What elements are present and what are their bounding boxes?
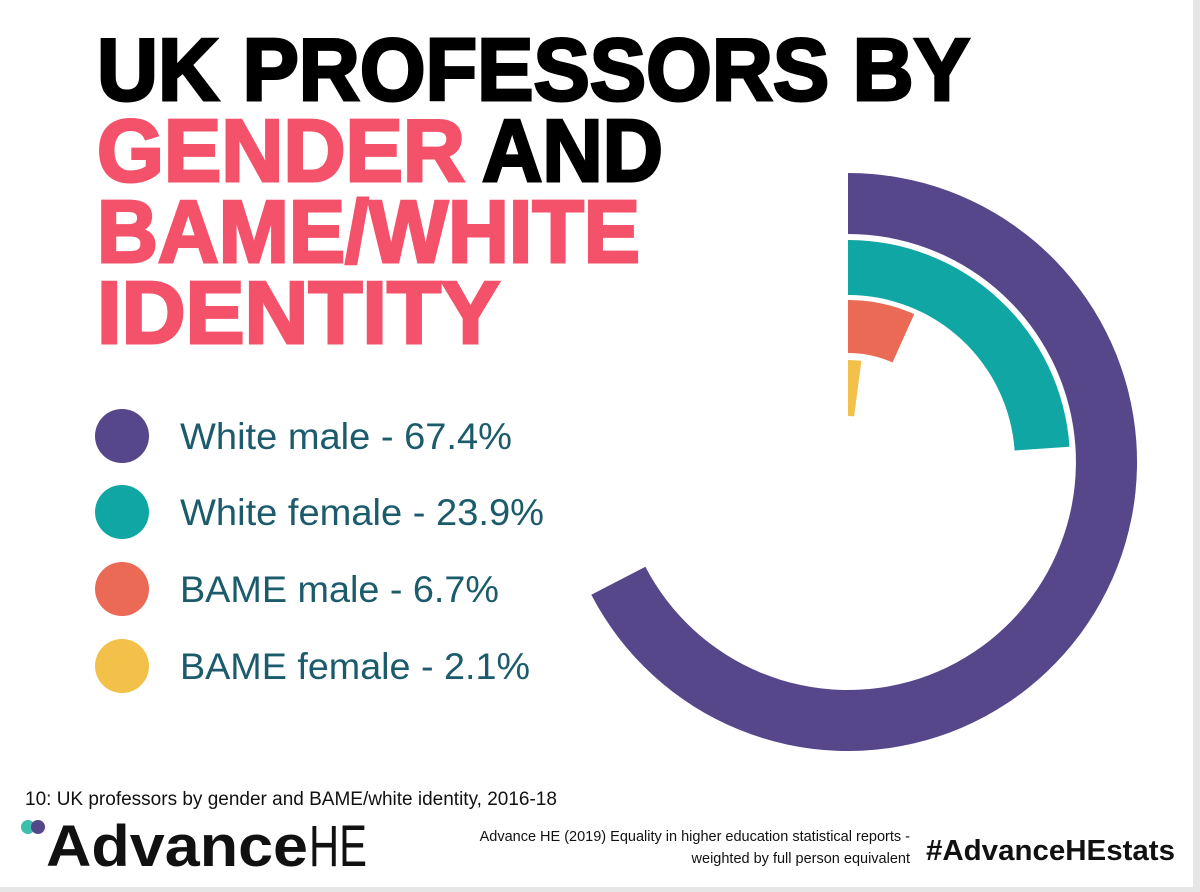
legend item: BAME female: BAME female - 2.1%	[180, 646, 530, 687]
citation	[480, 829, 910, 867]
legend item: White female	[95, 485, 544, 539]
title: IDENTITY	[97, 263, 500, 362]
radial bar chart	[591, 173, 1137, 751]
legend item: White male	[95, 409, 512, 463]
arc: BAME female 2.1%	[848, 360, 861, 416]
title: GENDER	[97, 101, 465, 200]
legend item: White female: White female - 23.9%	[180, 492, 544, 533]
legend item: BAME male	[95, 562, 499, 616]
title: BAME/WHITE	[97, 182, 640, 281]
citation: weighted by full person equivalent	[691, 851, 910, 867]
legend	[95, 409, 544, 693]
logo: Advance HE: Advance	[46, 814, 308, 879]
arc: White female 23.9%	[848, 240, 1070, 450]
legend item: BAME female	[95, 639, 530, 693]
logo: Advance HE: HE	[309, 814, 367, 879]
citation: Advance HE (2019) Equality in higher education statistical reports -	[480, 829, 910, 845]
legend item: White male: White male - 67.4%	[180, 416, 512, 457]
arc: White male 67.4%	[591, 173, 1137, 751]
title	[97, 20, 970, 362]
caption: 10: UK professors by gender and BAME/white identity, 2016-18	[25, 789, 557, 810]
hashtag: #AdvanceHEstats	[926, 835, 1175, 867]
arc: BAME male 6.7%	[848, 300, 914, 362]
title: UK PROFESSORS BY	[97, 20, 970, 119]
title: AND	[482, 101, 663, 200]
legend item: BAME male: BAME male - 6.7%	[180, 569, 499, 610]
logo: Advance HE	[21, 814, 367, 879]
